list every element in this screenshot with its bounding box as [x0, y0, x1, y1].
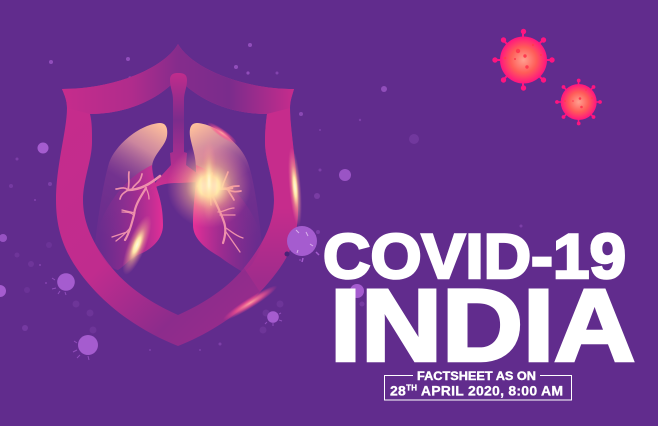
bronchi right: [198, 172, 243, 252]
purple virus: bottom right: [265, 311, 282, 326]
red virus: small: [555, 79, 602, 125]
date label: 28: [390, 382, 406, 398]
date label: APRIL 2020, 8:00 AM: [417, 382, 563, 398]
background particles: [9, 43, 522, 351]
purple virus: small ones: [0, 142, 364, 298]
bronchi left: [112, 172, 160, 241]
left lung: [95, 123, 167, 270]
title: COVID-19: COVID-19: [323, 222, 626, 292]
lungs: [95, 73, 262, 278]
purple virus: left: [52, 273, 75, 295]
date box: [384, 376, 572, 400]
shield: [56, 44, 298, 346]
red virus: large: [492, 29, 555, 91]
right lung: [190, 123, 262, 272]
factsheet label: FACTSHEET AS ON: [417, 369, 536, 383]
glow: right lung: [167, 138, 251, 228]
trachea: [150, 73, 210, 190]
shield flares: [220, 147, 304, 324]
purple virus: large right: [284, 226, 319, 262]
flare: left lung: [117, 212, 157, 278]
purple virus: bottom left: [73, 335, 98, 360]
flare: right lung top: [205, 119, 239, 147]
date label: TH: [406, 384, 417, 392]
title: INDIA: INDIA: [330, 268, 635, 382]
